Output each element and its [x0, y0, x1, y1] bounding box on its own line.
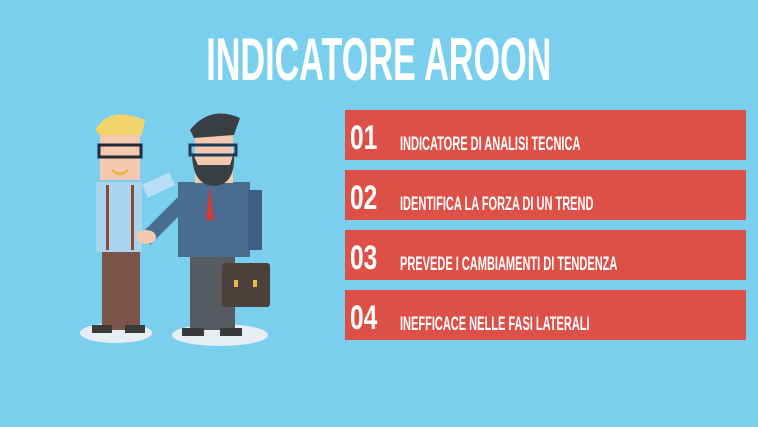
item 04: INEFFICACE NELLE FASI LATERALI — [400, 314, 590, 335]
item 02: 02 — [350, 179, 377, 217]
shadows — [80, 323, 152, 343]
item 03 — [345, 230, 746, 280]
right man — [140, 114, 270, 336]
item 03: 03 — [350, 239, 377, 277]
left man — [92, 114, 175, 333]
item 01: INDICATORE DI ANALISI TECNICA — [400, 134, 580, 155]
title: INDICATORE AROON — [206, 26, 552, 93]
handshake — [136, 230, 156, 244]
item 02 — [345, 170, 746, 220]
illustration: two businessmen shaking hands — [80, 114, 270, 346]
item 01: 01 — [350, 119, 377, 157]
item 02: IDENTIFICA LA FORZA DI UN TREND — [400, 194, 593, 215]
item 01 — [345, 110, 746, 160]
item 04: 04 — [350, 299, 377, 337]
item 04 — [345, 290, 746, 340]
item 03: PREVEDE I CAMBIAMENTI DI TENDENZA — [400, 254, 617, 275]
